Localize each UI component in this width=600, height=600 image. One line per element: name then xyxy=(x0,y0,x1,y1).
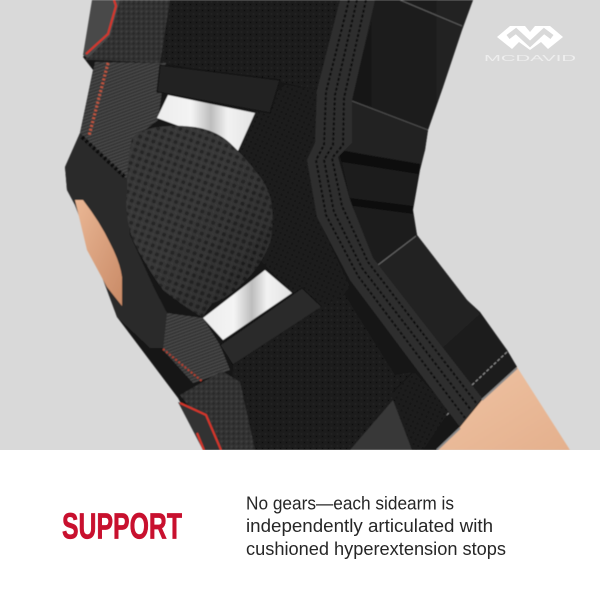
white caption band xyxy=(0,450,600,600)
pad mesh xyxy=(126,126,273,318)
line three: cushioned hyperextension stops xyxy=(246,539,506,559)
plate base xyxy=(178,402,223,450)
brace body xyxy=(65,0,517,450)
plate red mark xyxy=(197,433,204,450)
plate red edge xyxy=(180,403,221,450)
upper velcro strap dark xyxy=(160,0,342,90)
red stitching upper xyxy=(89,63,108,136)
hyperextension pad xyxy=(126,126,273,318)
lower grey strap xyxy=(350,400,412,450)
band base xyxy=(307,0,482,427)
metal sidearm upper xyxy=(157,95,255,153)
sleeve panel below fold xyxy=(342,162,418,206)
calf seam xyxy=(374,236,480,353)
knee brace photo xyxy=(65,0,570,450)
lower velcro strap light xyxy=(180,371,255,450)
upper velcro strap light xyxy=(85,0,175,63)
pad shading xyxy=(126,126,273,318)
red stitching lower xyxy=(163,349,203,382)
second fold shadow xyxy=(350,198,413,216)
McDavid logo xyxy=(484,26,576,63)
cuff panel xyxy=(438,314,517,400)
skin through hole xyxy=(75,200,122,306)
line one: No gears—each sidearm is xyxy=(246,494,454,514)
heading: support: SUPPORT xyxy=(62,506,182,546)
description text xyxy=(246,494,506,559)
middle sleeve panel xyxy=(342,100,428,166)
line two: independently articulated with xyxy=(246,516,493,536)
sleeve fold shadow xyxy=(338,150,420,176)
lower sleeve panel xyxy=(353,206,417,268)
sleeve seam middle xyxy=(352,101,428,130)
photo background xyxy=(0,0,600,450)
lower elastic panel xyxy=(163,313,230,383)
logo wordmark: MCDAVID xyxy=(484,53,576,63)
upper sleeve seam xyxy=(400,0,462,26)
elastic upper panel xyxy=(80,62,166,180)
lower mesh patch xyxy=(393,372,450,450)
stitched edge xyxy=(82,137,126,178)
skin below the brace xyxy=(437,367,570,450)
lower velcro strap dark xyxy=(230,295,423,450)
band stitching xyxy=(316,0,477,418)
cuff edge xyxy=(437,368,517,450)
plate base xyxy=(83,0,120,58)
metal sidearm lower xyxy=(203,270,292,340)
logo mark xyxy=(497,26,563,50)
plate red edge xyxy=(86,0,116,54)
stitched elastic band xyxy=(307,0,482,427)
lower strap tab xyxy=(220,288,322,365)
mesh main area xyxy=(240,85,350,310)
upper red logo plate xyxy=(83,0,120,58)
logo chevron cut xyxy=(508,31,552,44)
upper sleeve panel xyxy=(352,0,473,130)
lower red logo plate xyxy=(178,402,223,450)
upper strap tab xyxy=(157,65,280,113)
calf sleeve panel xyxy=(373,235,480,352)
neoprene around hole xyxy=(65,133,167,348)
cuff stitching xyxy=(428,352,507,432)
